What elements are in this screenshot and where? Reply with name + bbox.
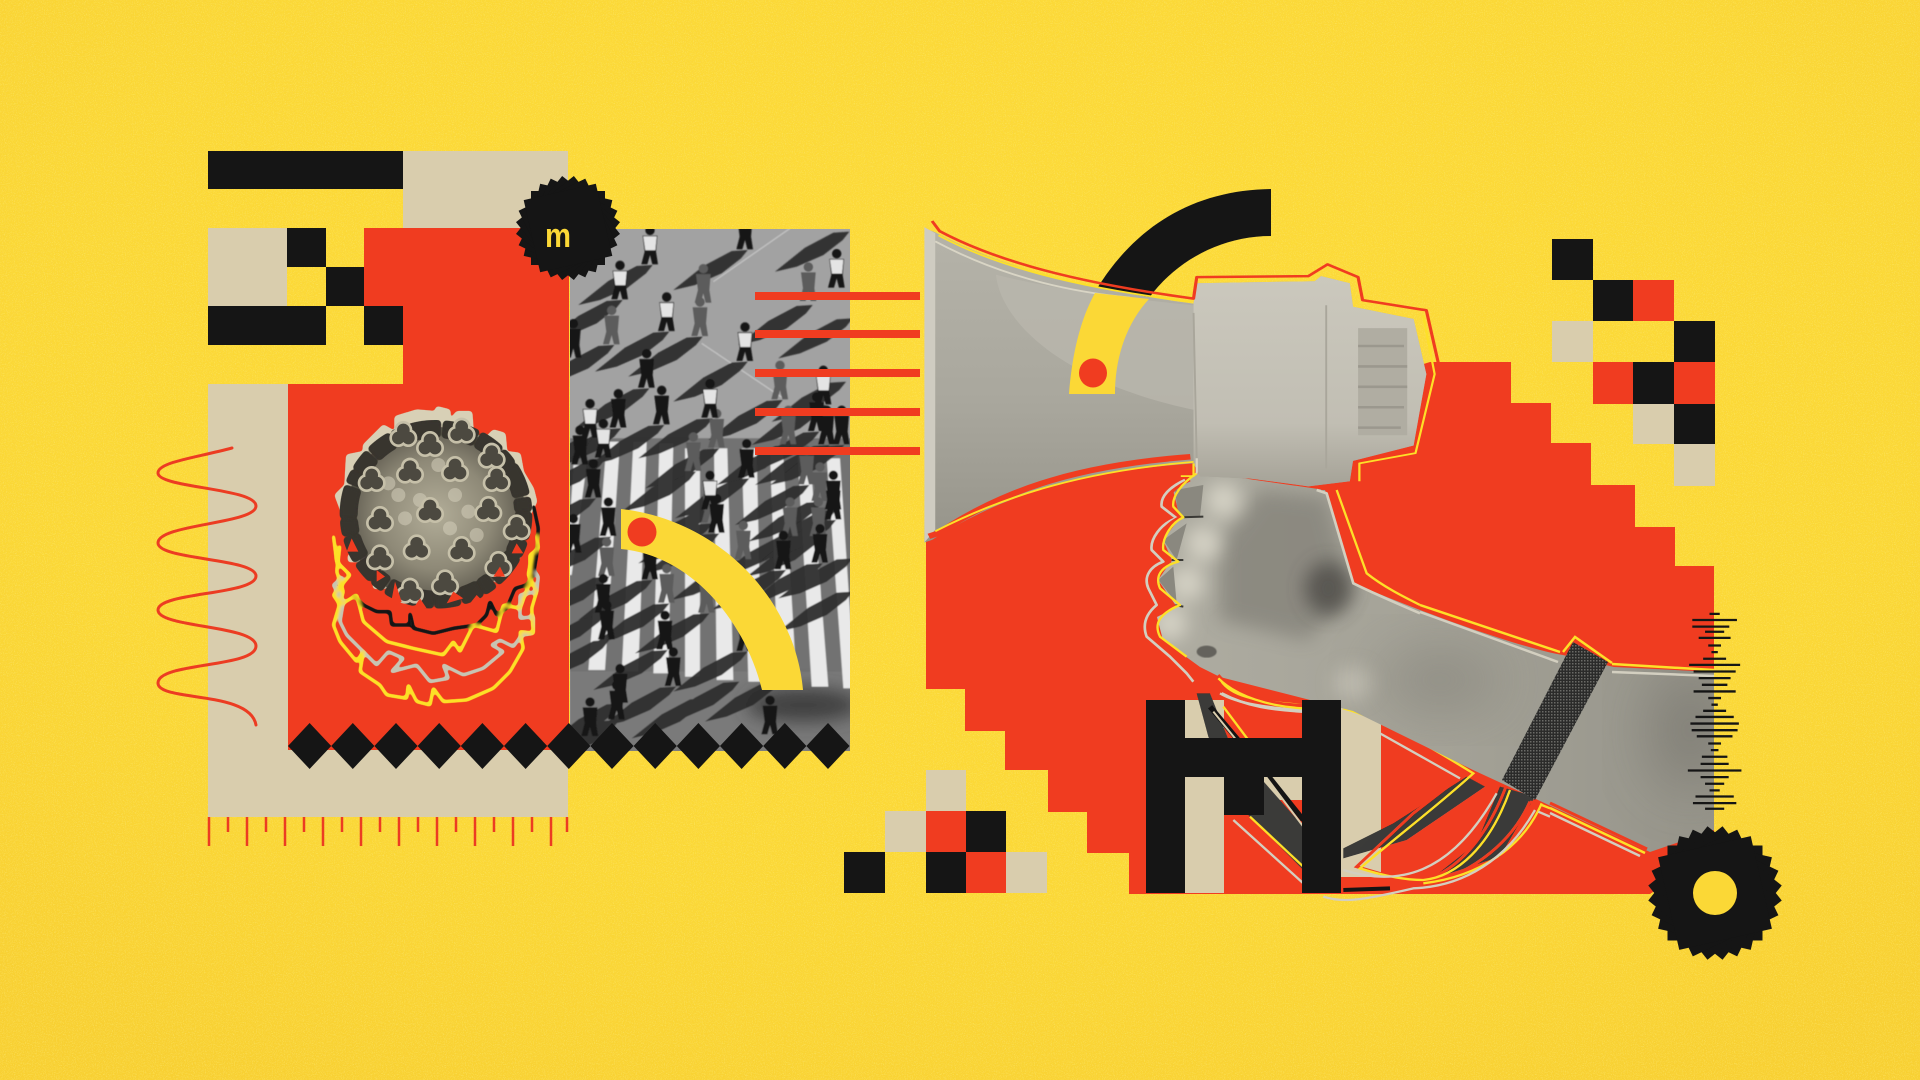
finger and arm outlines [1145,473,1420,712]
virus body [347,427,525,602]
black diamond band [288,723,850,769]
forearm far shade [1650,670,1730,790]
icon: virus [333,407,538,705]
thumb crease [1197,646,1217,658]
body seams [1194,305,1326,468]
cylinder body [1194,276,1426,486]
lower asphalt [570,672,855,752]
badge with m logo: m [545,217,571,255]
beige paper shapes [208,151,568,817]
dark pedestrians [565,211,850,736]
hand and arm [1145,472,1730,856]
sound wave [1688,614,1741,809]
wrist shadow [1305,562,1352,615]
crossing ground [570,438,855,688]
forearm outlines [1420,605,1714,856]
wrist strap [1502,642,1608,800]
yellow arc on photo [621,509,803,690]
arm skin [1157,472,1714,852]
virus red gaps [347,538,523,608]
forearm shade [1380,650,1500,710]
finger shading [1158,485,1203,603]
wrist highlight [1333,667,1373,700]
megaphone silhouette [924,229,1426,542]
beige bars behind letters [1185,700,1381,893]
asphalt shade [747,688,860,722]
hanging strap [1197,680,1550,900]
mid tone pedestrians [598,262,828,613]
yellow arc on megaphone [1069,293,1149,394]
palm shadow [1220,490,1353,640]
horn rim [924,227,935,542]
bottom pixel cluster [844,770,1047,893]
red connector lines [755,292,920,455]
panel: left block layout [208,151,569,817]
rear grille lines [1358,346,1407,428]
block letters H H [1146,700,1341,893]
strap edge lines [1210,680,1550,900]
megaphone [924,221,1439,542]
red panel [288,228,569,750]
megaphone outlines [929,221,1439,536]
virus outlines [333,505,538,705]
horn inner highlight [996,275,1194,410]
rear grille [1358,328,1407,435]
virus dark rim [349,429,523,600]
top right pixel cluster [1552,239,1715,486]
strap bands [1197,693,1535,880]
cast shadows [570,231,850,746]
virus spike rim [335,407,537,588]
red dot on megaphone [1079,358,1107,388]
squiggle wave [158,448,256,725]
tick ruler [209,817,567,846]
gear icon [1648,826,1782,960]
virus proteins [367,427,522,595]
photo: crowd on zebra crossing [570,229,850,751]
black arc [1095,189,1271,298]
crossing stripes [567,442,855,688]
virus mottling [388,465,477,535]
wrist strap outline [1563,637,1612,663]
pavement seam [702,228,790,398]
light clothed pedestrians [583,236,843,495]
finger creases [1171,516,1204,608]
red dot on arc [628,518,656,546]
black pixel blocks [208,151,403,345]
arm shading [1158,485,1730,790]
red stepped panel [926,362,1714,894]
badge with m logo [516,176,620,280]
fist knuckle highlights [1170,500,1223,623]
